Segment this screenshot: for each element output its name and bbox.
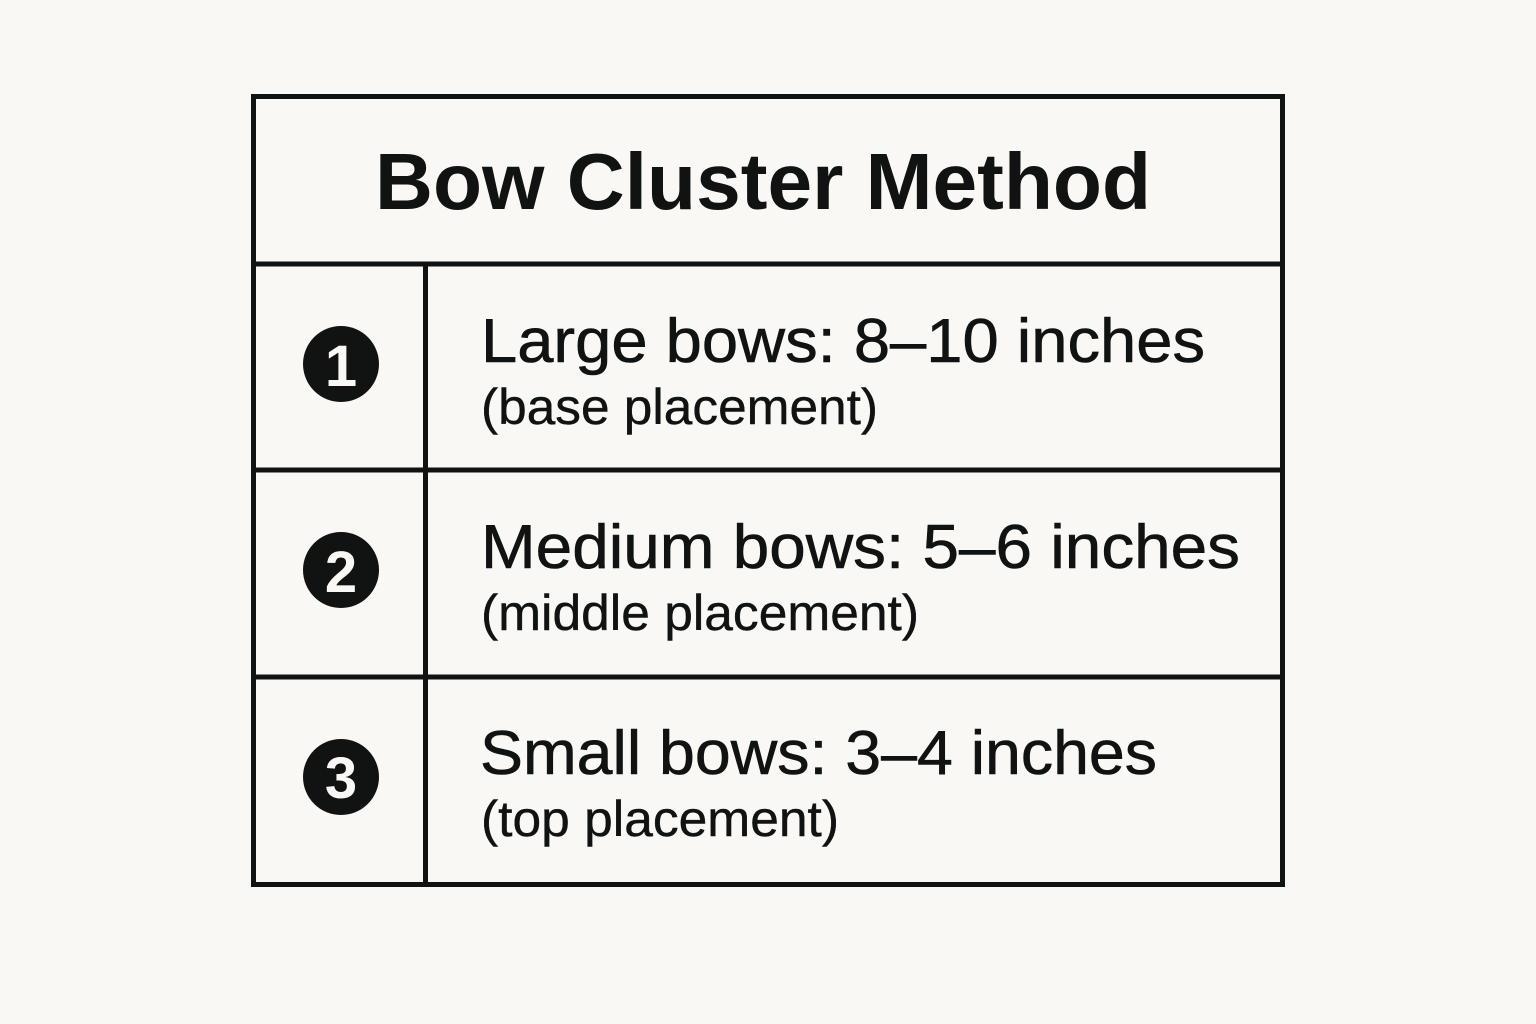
icon: number 3 badge	[303, 739, 379, 815]
small bows size: Small bows: 3–4 inches	[480, 719, 1157, 788]
medium bows size: Medium bows: 5–6 inches	[481, 513, 1240, 582]
icon: number 1 badge	[303, 326, 379, 402]
medium bows placement: (middle placement)	[481, 585, 919, 641]
small bows placement: (top placement)	[481, 791, 839, 847]
row 1: large bows	[303, 307, 1205, 435]
icon: number 1 badge: 1	[325, 334, 357, 399]
icon: number 2 badge	[303, 532, 379, 608]
icon: number 2 badge: 2	[325, 540, 357, 605]
large bows size: Large bows: 8–10 inches	[481, 307, 1205, 376]
row 3: small bows	[303, 719, 1157, 847]
icon: number 3 badge: 3	[325, 746, 357, 811]
large bows placement: (base placement)	[481, 379, 878, 435]
row 2: medium bows	[303, 513, 1240, 641]
table frame	[254, 96, 1282, 884]
title: Bow Cluster Method	[375, 137, 1151, 226]
